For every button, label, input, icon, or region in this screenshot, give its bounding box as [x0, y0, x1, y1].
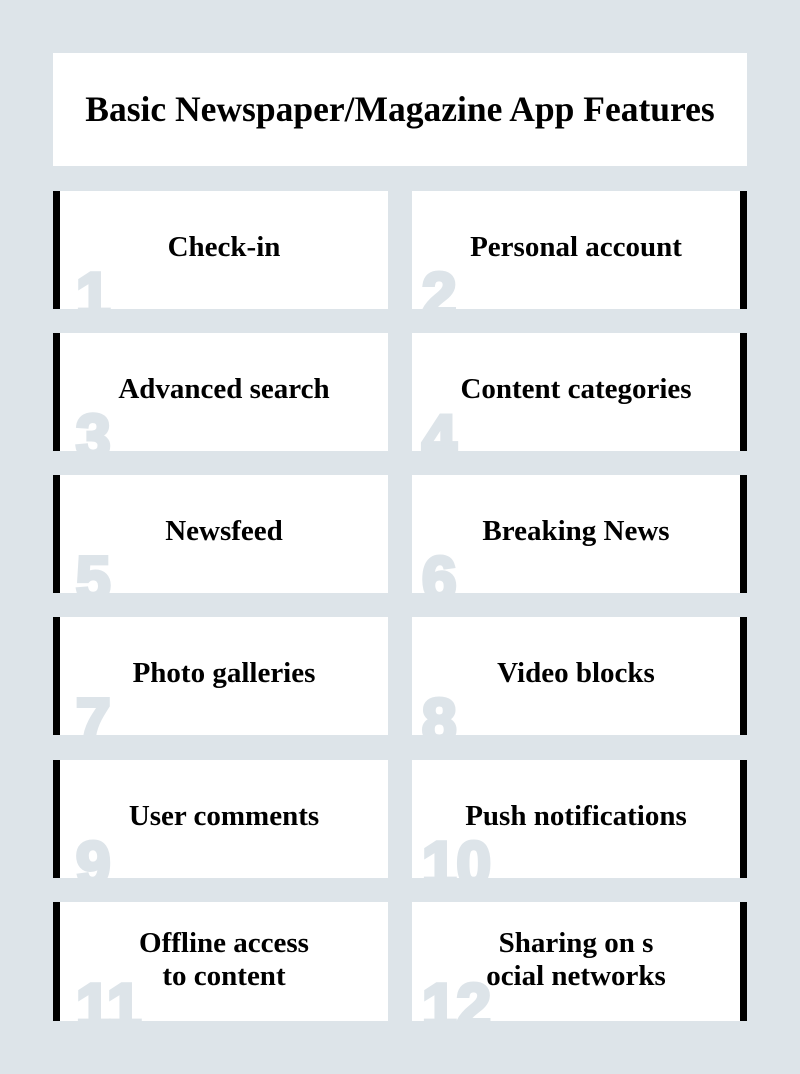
card 4	[412, 333, 747, 451]
card 6	[412, 475, 747, 593]
card 6: Breaking News	[482, 515, 670, 547]
card 2: Personal account	[470, 231, 682, 263]
card 11: Offline access	[139, 927, 309, 959]
card 7: Photo galleries	[133, 657, 315, 689]
card 10	[412, 760, 747, 878]
card 1	[53, 191, 388, 309]
card 3: Advanced search	[118, 373, 330, 405]
card 3	[53, 333, 388, 451]
card 4: Content categories	[460, 373, 692, 405]
card 1: Check-in	[168, 231, 280, 263]
card 12: ocial networks	[486, 960, 666, 992]
card 10: Push notifications	[465, 800, 687, 832]
card 7	[53, 617, 388, 735]
title: Basic Newspaper/Magazine App Features	[85, 88, 715, 128]
card 5: Newsfeed	[165, 515, 283, 547]
card 2	[412, 191, 747, 309]
card 9: User comments	[129, 800, 319, 832]
card 8	[412, 617, 747, 735]
card 8: Video blocks	[497, 657, 655, 689]
title	[53, 53, 747, 166]
card 9	[53, 760, 388, 878]
card 11: to content	[162, 960, 286, 992]
card 12: Sharing on s	[499, 927, 653, 959]
card 5	[53, 475, 388, 593]
card 12	[412, 902, 747, 1021]
card 11	[53, 902, 388, 1021]
